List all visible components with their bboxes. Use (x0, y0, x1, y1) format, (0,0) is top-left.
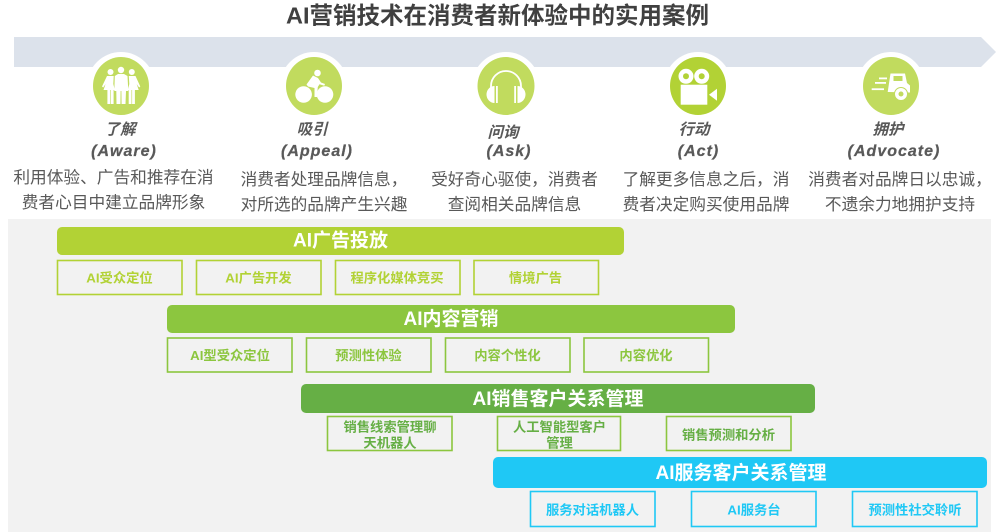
box: 销售线索管理聊天机器人: 销售线索管理聊 (343, 418, 437, 434)
stage english name: (Appeal) (281, 143, 353, 160)
panel: gray background (8, 219, 991, 532)
stage: ask (431, 52, 598, 214)
box: 内容优化: 内容优化 (619, 347, 673, 363)
box: AI型受众定位 (168, 338, 292, 372)
stage description (431, 170, 598, 214)
bar: AI服务客户关系管理 (493, 457, 987, 488)
stage heading: 问询 (487, 124, 521, 142)
stage description: 对所选的品牌产生兴趣 (241, 195, 408, 214)
box: 销售线索管理聊天机器人: 天机器人 (363, 434, 417, 450)
stage english name: (Aware) (91, 143, 157, 160)
group: AI content marketing (167, 305, 735, 372)
stage description (13, 168, 214, 212)
stage heading: 了解 (104, 120, 138, 138)
icon: cyclist (280, 52, 348, 120)
stage heading: 行动 (678, 120, 712, 138)
stage description: 费者心目中建立品牌形象 (22, 193, 205, 212)
title: AI营销技术在消费者新体验中的实用案例 (286, 2, 709, 28)
box: 程序化媒体竞买: 程序化媒体竞买 (350, 270, 444, 286)
stage description: 不遗余力地拥护支持 (825, 195, 975, 214)
bar: AI广告投放 (57, 227, 624, 255)
stage description (241, 170, 408, 214)
bar: AI广告投放: AI广告投放 (293, 230, 388, 252)
stage english name: (Act) (678, 143, 719, 160)
box: 内容个性化: 内容个性化 (474, 347, 541, 363)
box: AI广告开发: AI广告开发 (225, 270, 292, 286)
box: 人工智能型客户管理 (498, 416, 620, 450)
box: AI服务台 (692, 492, 816, 526)
box: 销售预测和分析: 销售预测和分析 (682, 426, 775, 442)
box: 内容个性化 (446, 338, 570, 372)
stage description: 受好奇心驱使，消费者 (431, 170, 598, 189)
box: 预测性社交聆听 (852, 492, 977, 526)
stage english name: (Advocate) (848, 143, 940, 160)
group: AI advertising (57, 227, 624, 294)
stage: advocate (808, 52, 992, 214)
box: AI受众定位 (58, 260, 182, 294)
box: 人工智能型客户管理: 人工智能型客户 (513, 418, 606, 434)
box: 销售预测和分析 (666, 416, 791, 450)
group: AI sales CRM (301, 384, 815, 450)
box: AI受众定位: AI受众定位 (86, 270, 153, 286)
stage description: 利用体验、广告和推荐在消 (13, 168, 214, 187)
timeline arrow (14, 37, 996, 67)
stage description: 消费者对品牌日以忠诚， (808, 170, 992, 189)
bar: AI内容营销 (167, 305, 735, 333)
stage heading: 拥护 (872, 120, 906, 138)
icon: headphones (472, 52, 540, 120)
stage: act (623, 52, 789, 214)
box: 情境广告 (474, 260, 598, 294)
group: AI service CRM (493, 457, 987, 526)
box: AI服务台: AI服务台 (727, 502, 781, 518)
box: 销售线索管理聊天机器人 (328, 416, 452, 450)
stage description: 费者决定购买使用品牌 (623, 195, 789, 214)
box: AI广告开发 (196, 260, 321, 294)
box: 人工智能型客户管理: 管理 (546, 434, 573, 450)
stage heading: 吸引 (296, 122, 329, 138)
box: 预测性社交聆听: 预测性社交聆听 (868, 502, 962, 518)
stage description (808, 170, 992, 214)
stage english name: (Ask) (486, 143, 532, 160)
bar: AI内容营销: AI内容营销 (403, 307, 499, 330)
stage description: 查阅相关品牌信息 (448, 195, 581, 214)
box: 预测性体验: 预测性体验 (335, 347, 402, 363)
stage description: 了解更多信息之后，消 (623, 170, 789, 189)
icon: speeding truck (857, 52, 925, 120)
icon: group of people (87, 52, 155, 120)
box: 程序化媒体竞买 (336, 260, 460, 294)
icon: movie camera (664, 52, 732, 120)
bar: AI服务客户关系管理: AI服务客户关系管理 (655, 461, 827, 484)
bar: AI销售客户关系管理: AI销售客户关系管理 (472, 387, 644, 410)
box: 服务对话机器人 (530, 492, 655, 526)
stage: aware (13, 52, 214, 212)
box: 预测性体验 (306, 338, 431, 372)
stage description (623, 170, 789, 214)
box: 服务对话机器人: 服务对话机器人 (546, 502, 639, 518)
box: 情境广告: 情境广告 (509, 270, 562, 286)
stage: appeal (241, 52, 408, 214)
box: AI型受众定位: AI型受众定位 (190, 347, 270, 363)
box: 内容优化 (584, 338, 708, 372)
bar: AI销售客户关系管理 (301, 384, 815, 413)
stage description: 消费者处理品牌信息， (241, 170, 407, 189)
